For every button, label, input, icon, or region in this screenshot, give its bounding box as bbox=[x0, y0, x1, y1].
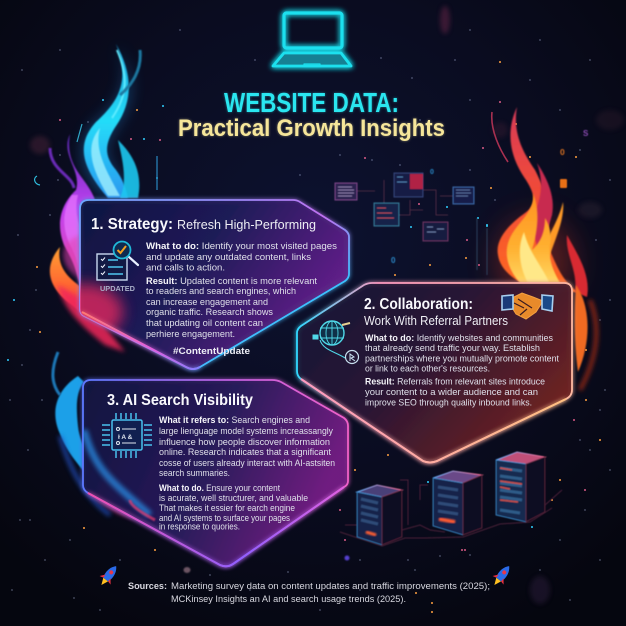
panel 1 text: Result: Updated content is more relevant bbox=[146, 275, 317, 286]
panel 1 text: and update any outdated content, links bbox=[146, 251, 311, 262]
panel: AI search visibility bbox=[83, 380, 348, 566]
panel 3 text: and AI systems to surface your pages bbox=[159, 512, 290, 523]
server racks bbox=[357, 452, 545, 545]
panel 3 heading: 3. AI Search Visibility bbox=[107, 392, 253, 409]
laptop icon bbox=[273, 13, 351, 66]
title: WEBSITE DATA: bbox=[224, 87, 399, 118]
panel 3 lower edge accent bbox=[88, 487, 344, 566]
sources: Sources: bbox=[128, 581, 167, 592]
icon: globe with referral link bbox=[313, 321, 358, 364]
lower left flame: blue ribbon bbox=[53, 352, 150, 520]
floating data cards bbox=[335, 129, 589, 275]
circuit traces under servers bbox=[340, 480, 562, 546]
icon: rocket left bbox=[96, 562, 122, 589]
left flame: purple, orange and red bbox=[50, 134, 125, 352]
panel 2 text: partnerships where you mutually promote content bbox=[365, 352, 559, 364]
panel 2 text: or link to each other's resources. bbox=[365, 362, 490, 374]
panel 1 text: that updating oil content can bbox=[146, 317, 263, 328]
panel 2 heading: 2. Collaboration: bbox=[364, 296, 473, 313]
right flame: red, orange and yellow bbox=[492, 107, 596, 390]
panel 2 lower edge accent bbox=[301, 379, 566, 462]
panel 3 text: in response to quories. bbox=[159, 520, 240, 532]
panel 3 shape bbox=[83, 380, 348, 566]
icon: AI chip: ł A & bbox=[118, 434, 133, 441]
icon: updated checklist with magnifier bbox=[97, 242, 138, 293]
panel 3 text bbox=[159, 414, 335, 532]
panel 1 lower edge accent bbox=[82, 312, 200, 369]
panel 3 text: What it refers to: Search engines and bbox=[159, 414, 310, 425]
panel 1 text: and calls to action. bbox=[146, 262, 225, 272]
floating data cards: S bbox=[583, 129, 589, 138]
panel: strategy bbox=[47, 200, 349, 369]
icon: updated checklist with magnifier: UPDATED bbox=[100, 284, 136, 293]
floating data cards: 0 bbox=[430, 169, 434, 176]
title: Practical Growth Insights bbox=[178, 115, 445, 142]
panel 3 text: is acurate, well structurer, and valuable bbox=[159, 492, 308, 503]
panel 2 text: Result: Referrals from relevant sites introduce bbox=[365, 376, 545, 386]
panel 1 text bbox=[146, 240, 337, 357]
server 1 bbox=[357, 485, 402, 545]
panel 2 heading: Work With Referral Partners bbox=[364, 314, 508, 328]
panel 2 heading bbox=[364, 296, 508, 328]
icon: handshake bbox=[502, 293, 553, 319]
panel 1 inner flame glow bbox=[80, 274, 132, 334]
panel 3 text: large lienguage model systems increassangly bbox=[159, 425, 333, 436]
panel 1 shape bbox=[80, 200, 349, 369]
panel 2 text: that already send traffic your way. Establish bbox=[365, 342, 540, 353]
panel 1 heading: 1. Strategy: bbox=[91, 216, 173, 233]
panel 2 text: improve SEO through quality inbound links. bbox=[365, 396, 532, 408]
panel 3 text: What to do. Ensure your content bbox=[159, 482, 280, 493]
title bbox=[178, 87, 445, 142]
sources: Marketing survey data on content updates and traffic improvements (2025); bbox=[171, 581, 490, 592]
icon: AI chip bbox=[102, 413, 152, 458]
panel 3 text: influence how people discover information bbox=[159, 436, 330, 447]
panel 1 text: perhiere engagement. bbox=[146, 328, 235, 339]
server 2 bbox=[433, 471, 482, 535]
panel 1 text: What to do: Identify your most visited pages bbox=[146, 240, 337, 251]
sources bbox=[128, 581, 490, 605]
panel 1 heading bbox=[91, 216, 316, 233]
panel 1 text: organic traffic. Research shows bbox=[146, 306, 273, 317]
panel 3 text: cosse of users already interact with AI-astsiten bbox=[159, 457, 335, 468]
panel 2 shape bbox=[297, 283, 572, 462]
panel 3 text: online. Research indicates that a significant bbox=[159, 446, 331, 457]
panel 1 text: can increase engagement and bbox=[146, 296, 268, 307]
panel 3 inner flame ribbons bbox=[84, 430, 155, 520]
panel 3 text: search summaries. bbox=[159, 467, 230, 478]
panel 3 text: That makes it essier for earch engine bbox=[159, 502, 295, 513]
panel 2 text: What to do: Identify websites and communities bbox=[365, 332, 553, 343]
server 3 bbox=[496, 452, 545, 522]
panel 1 text: to readers and search engines, which bbox=[146, 285, 296, 296]
floating data cards: 0 bbox=[391, 256, 396, 265]
panel 2 text bbox=[365, 332, 559, 408]
floating data cards: 0 bbox=[560, 147, 565, 157]
panel 1 heading: Refresh High-Performing bbox=[177, 218, 316, 232]
icon: rocket right bbox=[489, 562, 515, 589]
panel 2 text: your content to a wider audience and can bbox=[365, 386, 538, 397]
panel: collaboration bbox=[297, 283, 572, 462]
sources: MCKinsey Insights an AI and search usage trends (2025). bbox=[171, 594, 406, 605]
panel 1 text: #ContentUpdate bbox=[173, 346, 250, 357]
left flame: blue bbox=[35, 44, 157, 198]
